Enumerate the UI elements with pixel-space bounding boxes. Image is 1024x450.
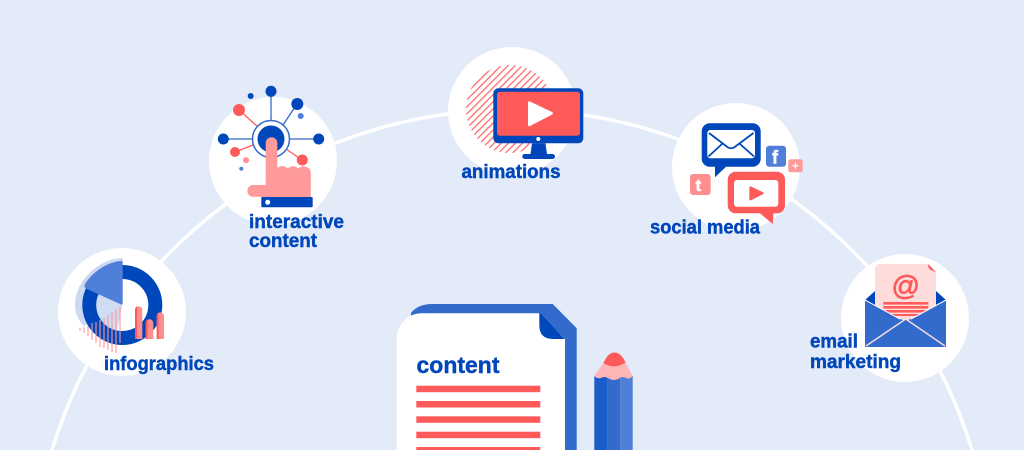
document corner fold	[539, 312, 565, 339]
icon: tumblr badge: t	[696, 176, 702, 195]
icon: facebook badge	[766, 146, 786, 168]
node circle: infographics	[58, 248, 186, 376]
icon: pencil	[594, 352, 633, 450]
label: social media: social media	[650, 216, 760, 238]
label: interactive content: interactive	[249, 211, 344, 233]
node: infographics	[58, 248, 214, 376]
node circle: email marketing	[841, 254, 969, 382]
document page	[397, 313, 565, 450]
icon: envelope speech bubble	[702, 123, 761, 177]
icon: hatched circle	[466, 65, 554, 153]
icon: facebook badge: f	[772, 148, 779, 168]
node: email marketing	[810, 254, 969, 382]
document back sheet	[411, 304, 577, 450]
connecting arc	[52, 110, 972, 450]
node circle: social media	[672, 103, 800, 231]
icon: donut and pie chart with bars	[75, 258, 164, 353]
node circle: interactive content	[209, 97, 337, 225]
label: email marketing: marketing	[810, 351, 901, 373]
node circle: animations	[448, 47, 576, 175]
node: social media	[650, 103, 803, 238]
label: infographics: infographics	[104, 353, 214, 375]
node: animations	[448, 47, 583, 183]
icon: open envelope with letter: @	[892, 270, 920, 301]
icon: plus badge	[788, 159, 803, 172]
document: content	[397, 304, 577, 450]
document text lines	[416, 386, 540, 450]
node: interactive content	[209, 86, 344, 252]
icon: open envelope with letter	[865, 264, 946, 347]
icon: monitor with play button	[493, 88, 583, 159]
icon: video speech bubble	[728, 172, 785, 224]
heading: content: content	[416, 352, 500, 378]
label: interactive content: content	[249, 230, 317, 252]
icon: hand pressing a network button	[218, 86, 324, 207]
icon: tumblr badge	[690, 174, 711, 195]
label: email marketing: email	[810, 330, 858, 352]
label: animations: animations	[462, 161, 561, 183]
